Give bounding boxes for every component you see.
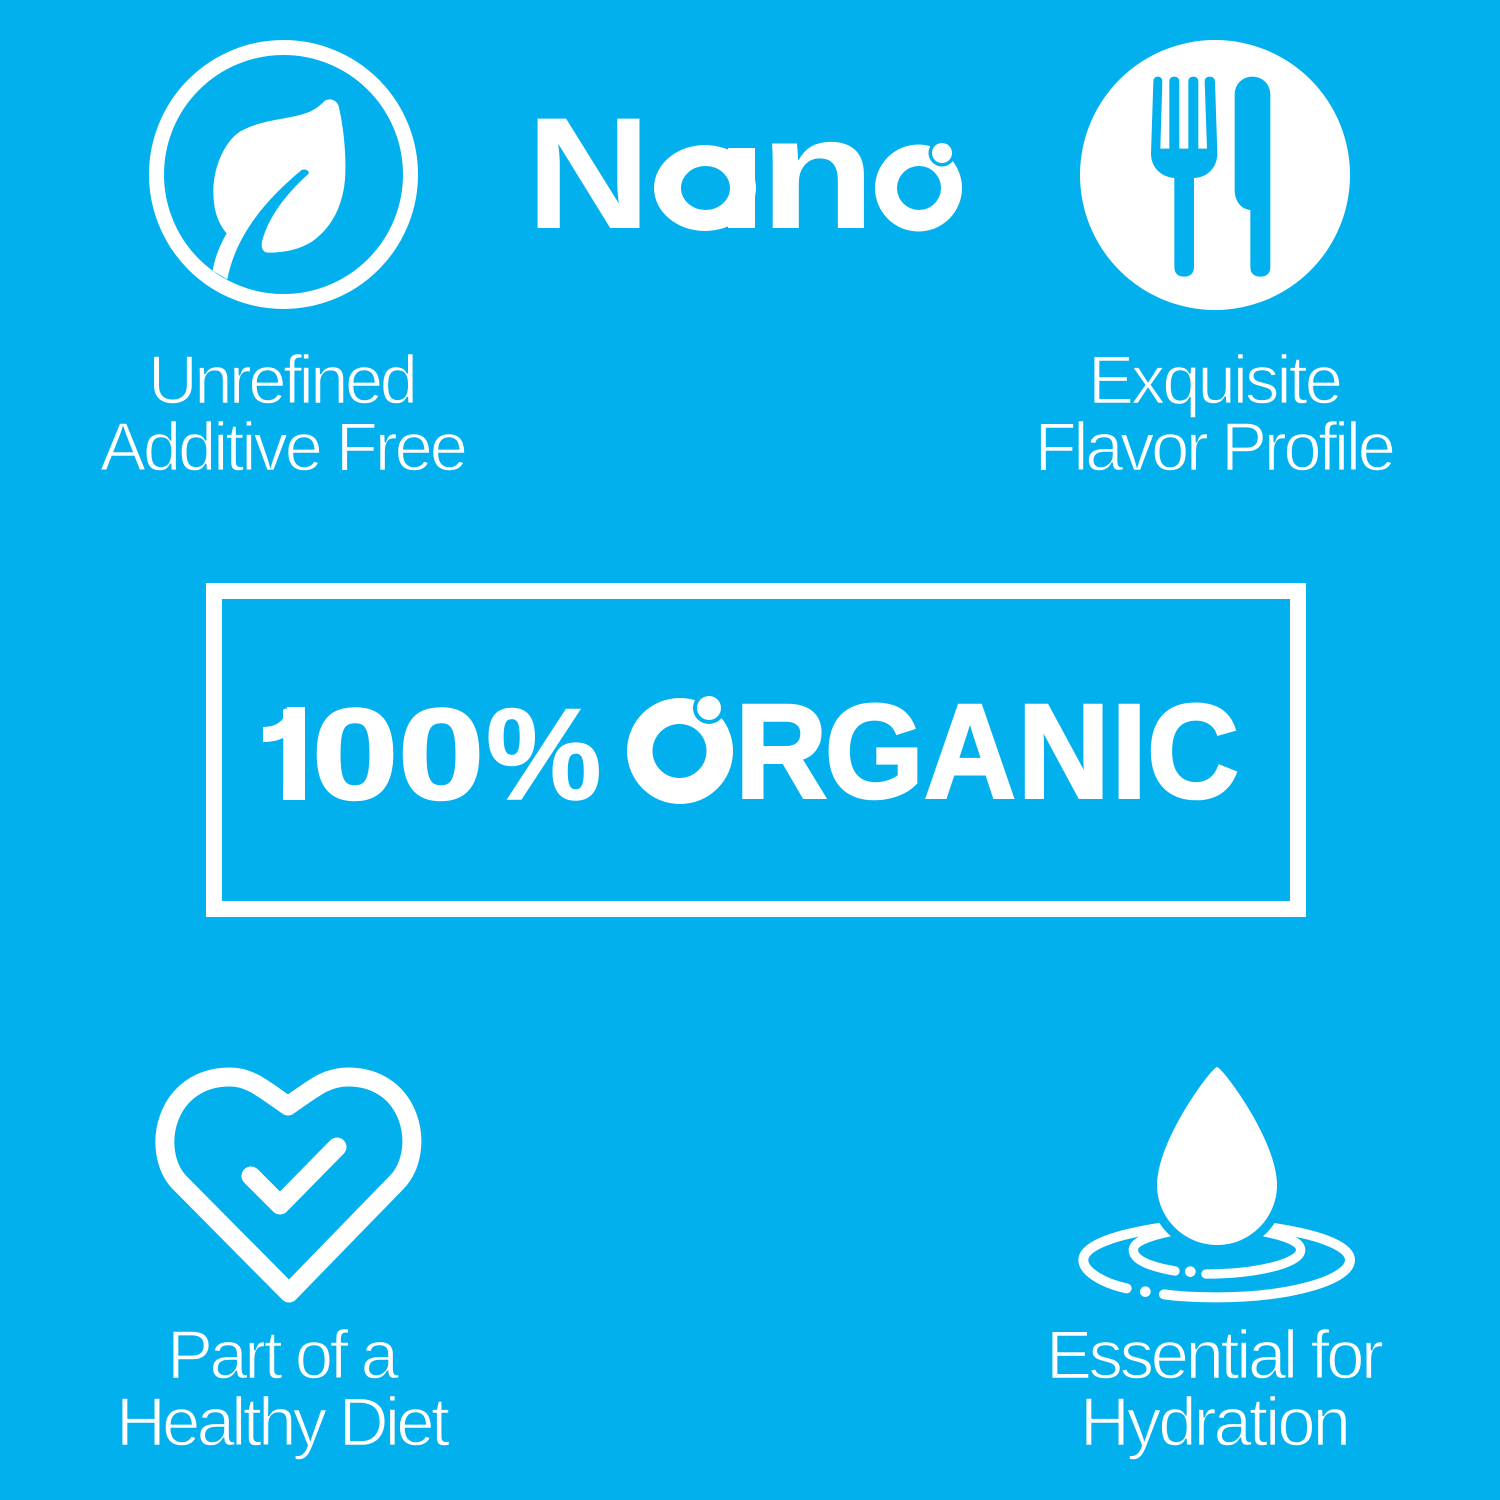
badge: 100% organic xyxy=(214,591,1298,909)
icon: water drop with ripples xyxy=(1083,1067,1350,1297)
logo: Nano: a xyxy=(663,114,731,248)
badge: 100% organic: RGANIC xyxy=(735,677,1239,826)
label: part of a healthy diet: Healthy Diet xyxy=(116,1384,450,1460)
label: unrefined additive free: Additive Free xyxy=(100,408,468,486)
label: essential for hydration: Essential for xyxy=(1046,1316,1384,1394)
logo: Nano xyxy=(526,84,962,263)
icon: heart with check mark xyxy=(165,1077,412,1293)
label: exquisite flavor profile: Exquisite xyxy=(1088,342,1343,418)
label: part of a healthy diet xyxy=(116,1316,450,1460)
label: part of a healthy diet: Part of a xyxy=(167,1316,400,1394)
badge: 100% organic: 1 xyxy=(248,682,335,827)
icon: fork and knife in circle xyxy=(1080,40,1350,310)
label: essential for hydration: Hydration xyxy=(1080,1384,1351,1460)
label: exquisite flavor profile: Flavor Profile xyxy=(1034,408,1396,486)
badge: 100% organic: % xyxy=(486,681,602,827)
label: unrefined additive free xyxy=(100,342,468,486)
logo: Nano: n xyxy=(759,84,876,263)
label: exquisite flavor profile xyxy=(1034,342,1396,486)
icon: leaf in circle xyxy=(156,48,410,302)
logo: Nano: o xyxy=(888,119,955,242)
badge: 100% organic: O xyxy=(645,695,723,807)
label: unrefined additive free: Unrefined xyxy=(148,342,418,418)
badge: 100% organic: 00 xyxy=(312,682,485,827)
label: essential for hydration xyxy=(1046,1316,1384,1460)
logo: Nano: N xyxy=(526,85,651,262)
